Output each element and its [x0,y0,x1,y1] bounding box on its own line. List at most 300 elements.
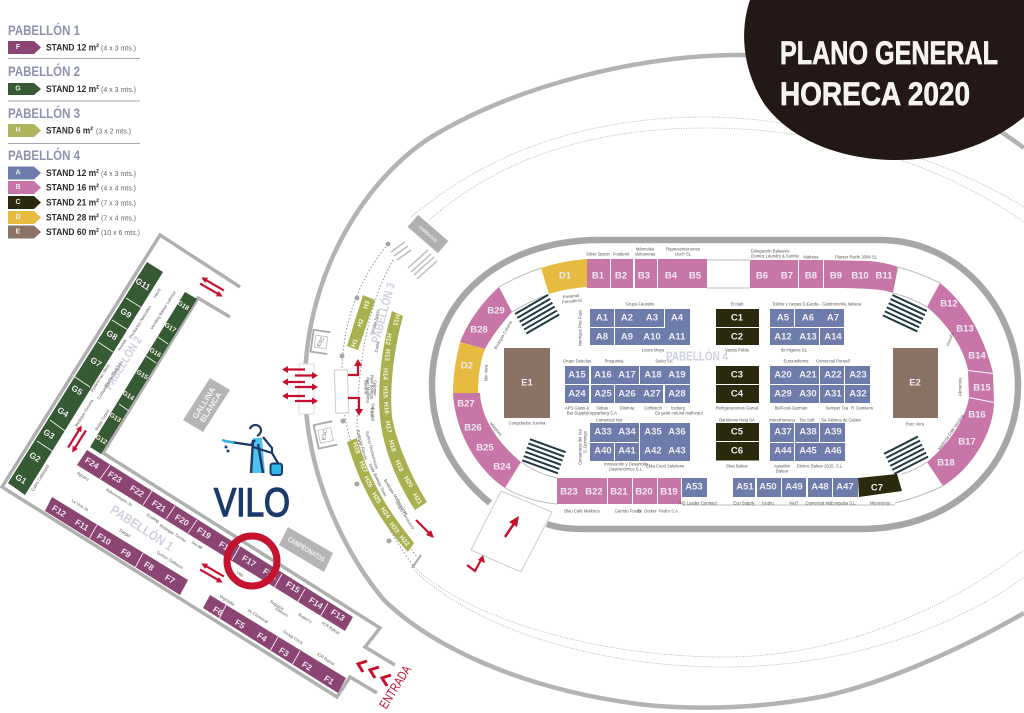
pavilion 4 stand labels: A41 [618,446,636,456]
pavilion 4 exhibitors: Comercial Mut [806,500,833,506]
pavilion 4 stand labels: A23 [849,370,867,380]
pavilion 4 exhibitors: Bartolome Heiq SA [719,418,755,422]
pavilion 4 stand labels: B15 [973,382,991,394]
H labels: H19 [393,459,405,473]
legend [8,21,140,238]
entrance exhibitors: Sidra Mal [370,403,376,421]
arrows bottom of pavilion 2 [64,424,90,454]
pavilion 4 exhibitors: Sidras [596,406,608,410]
pavilion 4 exhibitors: Comercial Ponsell [816,358,850,364]
pavilion 4 exhibitors: Garda - Gastronomía Italiana [807,302,862,306]
F exhibitors: Vegetalia [218,593,236,607]
pavilion 4 exhibitors: Aquathin [774,464,791,468]
F labels: F17 [240,553,258,569]
F exhibitors: Bodegas Tierras [159,523,187,543]
pavilion 4 exhibitors: Marphos [489,421,503,437]
pavilion 4 stand labels: B19 [660,486,678,498]
campeonatos block [279,527,333,572]
pavilion 4 stand labels: A39 [824,426,842,438]
entrance exhibitors: Bavaria [364,380,368,395]
entrada label: ENTRADA [376,662,414,711]
pavilion 4 A stands [565,309,870,497]
campeonatos block: CAMPEONATOS [286,536,326,564]
pavilion 4 stand labels: A21 [799,370,817,380]
pavilion 4 stand labels: B14 [968,350,986,362]
F labels [50,455,347,687]
legend: pabellon 4: STAND 21 m² [46,198,99,208]
F labels: F9 [119,546,133,560]
H labels: H15 [382,386,388,398]
legend: pabellon 4 [8,146,140,238]
G labels: G2 [28,450,43,464]
legend: pabellon 4: STAND 28 m² [46,212,99,224]
H labels: H21 [411,492,423,506]
pavilion 4 exhibitors: Mallorca Café Vending [937,413,966,451]
pavilion 4 stand labels: A47 [836,482,854,492]
pavilion 4 exhibitors [484,246,966,514]
pavilion 4 E stands [504,348,938,418]
pavilion 4 stand labels: D2 [461,360,473,372]
F exhibitors: ICR Balear [316,651,337,667]
legend: pabellon 4: E [16,228,21,236]
F labels: F14 [307,595,325,611]
G labels [14,276,190,486]
H labels: H1 [350,338,360,348]
L arrow up [348,359,362,375]
pavilion 4 exhibitors: Min Vera [484,364,488,381]
pavilion 4 stand labels: A17 [618,370,636,380]
legend: pabellon 4: STAND 12 m² [46,168,99,179]
pavilion 4 exhibitors: Congelados Juvima [509,420,546,426]
pavilion 4 exhibitors: Poncho [945,331,955,347]
pavilion 4 stand labels: A48 [811,482,829,492]
G exhibitors: Vending Balear Lubrisur [149,289,177,330]
pavilion 4 stand labels: A25 [594,388,612,400]
legend: pabellon 4: B [15,184,21,191]
F labels: F21 [150,498,168,514]
pavilion 4 stand labels: B10 [851,270,869,282]
H labels: H26 [362,475,374,489]
H exhibitors: Daily Bodega Suau [368,463,388,498]
pavilion 4 C stands [716,309,902,497]
F labels: F1 [322,673,336,687]
pavilion 4 exhibitors: Blau Café Mallorca [564,508,600,514]
G exhibitors: Bugui Gasoil [94,409,110,431]
pavilion 1 and 2 red arrows [64,275,227,585]
gallina blanca block: GALLINA [191,386,217,421]
pavilion 3 dotted corridor [342,244,417,567]
H exhibitors: Dorada Spirits [369,309,381,335]
G labels: G16 [148,347,162,359]
pavilion 4 D stands [453,259,587,393]
F exhibitors: Ini Chemical [247,608,269,624]
G labels: G8 [105,328,120,342]
pavilion 4 ring [432,240,1018,529]
arrows pavilion 1 [197,561,227,585]
pavilion 4 stand labels: B13 [956,324,974,334]
pavilion 4 exhibitors: Salvo SA [655,358,673,364]
pavilion 4 exhibitors: Toldos y carpas S.L. [772,302,810,306]
H exhibitors: Tulsa [369,407,375,418]
pavilion 4 stand labels: A15 [568,370,586,380]
title text: HORECA 2020 [780,76,970,112]
F exhibitors: Gruop Coca [282,629,304,645]
legend: pabellon 4: C [15,199,21,206]
pavilion 4 stand labels: A51 [736,482,754,492]
pavilion 4 exhibitors: Coffetech [644,406,663,410]
legend: pabellon 4: (7 x 4 mts.) [101,216,136,222]
legend: pabellon 4: (10 x 6 mts.) [101,230,140,237]
F exhibitors: Ruben's [297,612,313,624]
pavilion 4 exhibitors: BidFood-Guzman [775,406,808,410]
pavilion 4 stand labels: C5 [731,426,744,438]
pavilion 3 stands [347,295,427,552]
outer venue ring [305,55,1024,708]
corridor nodes [340,242,392,544]
F labels: F12 [50,503,68,519]
pavilion 4 stand labels: A18 [644,370,662,380]
vilo wordmark: VILO [214,481,290,525]
pavilion 4 exhibitors: Balear [776,468,789,474]
pavilion 4 stand labels: A37 [774,426,792,438]
pavilion 4 exhibitors: Dr. Oetker [637,508,657,514]
pavilion 4 stand labels: A14 [824,332,842,342]
pavilion 4 exhibitors: Tec Soft [799,418,815,422]
pavilion 4 stand labels: A38 [799,426,817,438]
pavilion 4 stand labels: A27 [643,388,661,400]
gimnasio block [408,215,448,253]
pavilion 4 exhibitors: S. Domingo [582,430,588,453]
legend: pabellon 1: (4 x 3 mts.) [101,46,136,52]
H labels: H13 [383,349,391,362]
F exhibitors: La Uva Ja [71,498,90,512]
pavilion 4 stand labels: A32 [849,388,867,400]
pavilion 4 stand labels: A33 [594,426,612,438]
F labels: F13 [329,607,347,623]
pavilion 4 stand labels: B7 [781,270,793,282]
F labels: F20 [173,512,191,528]
service room top: ESC [316,336,326,348]
pavilion 4 stand labels: A19 [668,370,686,380]
H labels: H28 [351,441,361,455]
G labels: G5 [70,383,85,397]
pavilion 4 exhibitors: Bodegas Coloma [493,319,514,350]
F exhibitors: Seguros [269,599,285,611]
G labels: G14 [121,390,135,402]
G labels: G13 [108,412,122,424]
G exhibitors: Hexis [152,287,162,299]
pavilion 1 stands [45,450,353,693]
pavilion 4 stand labels: B1 [592,270,605,282]
pavilion 4 stand labels: C1 [731,312,744,324]
pavilion 4 stand labels: A30 [799,388,817,400]
pavilion 4 stand labels: A16 [594,370,612,380]
pavilion 4 stand labels: C6 [731,446,743,456]
F labels: F3 [277,645,291,659]
F exhibitors: Balears [275,606,289,618]
F labels: F15 [284,579,302,595]
pavilion 4 exhibitors: Panamar [562,293,580,299]
pavilion 4 stand labels: A49 [785,482,803,492]
pavilion 4 exhibitors: Ibi Higiene SL [781,348,808,352]
pavilion 4 stand labels: A22 [824,370,842,380]
pavilion 4 exhibitors: Ivernigas Prat Faus [578,310,582,346]
pavilion 4 stand labels: B21 [610,486,628,498]
H labels: H18 [387,439,397,453]
pavilion 4 exhibitors: Ekka Food Solutions [646,464,684,468]
pavilion 4 stand labels: A53 [685,482,703,492]
G exhibitors: Cafés Cafetland [30,463,50,492]
pavilion 4 exhibitors: Lluch SL [675,252,692,256]
pavilion 4 exhibitors: Microvinos [870,500,890,506]
pavilion 2 watermark: PABELLÓN 2 [100,333,145,392]
G exhibitors: Productos Naturales [128,305,152,339]
H labels: H25 [370,491,382,505]
H exhibitors: Colomer [372,380,378,397]
pavilion 4 stand labels: A3 [646,312,658,324]
entry arrow [505,516,519,537]
pavilion 4 watermark: PABELLÓN 4 [666,348,729,364]
pavilion 4 stand labels: A36 [668,426,686,438]
legend: pabellon 2: PABELLÓN 2 [8,62,80,79]
pavilion 4 stand labels: A9 [621,332,633,342]
pavilion 4 exhibitors: Innovación y Desarrollo [604,462,649,466]
pavilion 4 exhibitors: Shat Balear [726,464,749,468]
G labels: G4 [56,405,71,419]
H exhibitors [356,309,416,531]
G exhibitors: Bodegas Excelia [74,398,95,428]
pavilion 4 exhibitors: Licors Moya [642,348,665,352]
F labels: F5 [233,617,247,631]
pavilion 4 exhibitors: Icedru [762,500,774,506]
legend: pabellon 4: D [15,214,21,221]
pavilion 1 watermark: PABELLÓN 1 [108,502,176,554]
F labels: F19 [195,525,213,541]
pavilion 4 exhibitors: Iceberg [671,406,686,410]
legend: pabellon 3: (3 x 2 mts.) [96,128,131,136]
pavilion 4 stand labels: A29 [774,388,792,400]
G labels: G17 [163,322,177,334]
H exhibitors: Marí Mallorca [366,377,370,403]
F exhibitors: Vilo [236,570,245,578]
H exhibitors: Bodegas Ramón [356,429,369,461]
pavilion 4 stand labels: A13 [799,332,817,342]
pavilion 4 exhibitors: Comercial Nut [596,418,623,422]
H labels: H14 [381,368,389,380]
legend: pabellon 4: (4 x 3 mts.) [101,171,136,178]
pavilion 4 stand labels: A31 [824,388,842,400]
title text [780,35,998,112]
gate pavilion 3 [299,330,376,449]
pavilion 4 stand labels: E2 [909,378,921,388]
pavilion 4 exhibitors: Semper Tea [826,406,849,410]
pavilion 4 stand labels: B5 [689,270,702,282]
pavilion 4 exhibitors: Ruiz Vera [906,422,925,426]
G exhibitors: Aroma [117,338,128,352]
F exhibitors: Aguara [76,470,91,482]
pavilion 4 exhibitors: Grupo Faustino [626,302,655,306]
legend: pabellon 1: STAND 12 m² [46,42,99,54]
pavilion 4 stand labels: A35 [644,426,662,438]
F labels: F10 [95,531,113,547]
pavilion 4 exhibitors: Es gelat natural mallorquí [655,410,704,416]
title blob [744,0,1024,160]
pavilion 4 stand labels: A12 [774,332,792,342]
pavilion 4 stand labels: A42 [644,446,662,456]
pavilion 4 exhibitors: Distroc Balear 2015, S.L. [797,464,843,468]
H labels: H22 [397,534,411,548]
F labels: F6 [211,604,225,618]
highlight circle [227,536,277,586]
legend: pabellon 1: PABELLÓN 1 [8,21,80,38]
H exhibitors: Cafés [374,341,380,353]
stairs pavilion 4 [515,295,928,474]
pavilion 4 exhibitors: APS Glass & [565,406,589,410]
H labels: H20 [402,475,414,489]
pavilion 2 stands [8,262,197,495]
pavilion 4 stand labels: A8 [596,332,608,342]
arrows top of pavilion 2 [197,275,227,299]
pavilion 4 stand labels: B4 [665,270,678,282]
legend: pabellon 1 [8,21,140,58]
legend: pabellon 4: STAND 60 m² [46,227,99,238]
pavilion 4 stand labels: B6 [756,270,768,282]
pavilion 4 stand labels: B24 [493,462,511,472]
pavilion 4 stand labels: C7 [871,482,883,494]
pavilion 4 stand labels: A28 [668,388,686,400]
H labels: H11 [391,314,401,327]
H labels: H27 [358,460,369,474]
F labels: F24 [83,455,101,471]
H exhibitors: Surfers Restauración [364,430,380,470]
pavilion 4 stand labels: C4 [731,388,744,400]
pavilion 4 stand labels: C2 [731,332,743,342]
pavilion 4 stand labels: A43 [668,446,686,456]
F labels: F18 [217,539,235,555]
F exhibitors: Sol 88 [191,540,204,551]
pavilion 4 stand labels: A6 [802,312,814,324]
vilo icon [222,425,282,475]
pavilion 4 stand labels: B12 [940,298,958,310]
G exhibitors: Comunidad de Baleares [96,360,124,400]
pavilion 4 exhibitors: Proquimia [605,358,624,364]
vilo logo [214,425,290,525]
F labels: F22 [128,483,146,499]
pavilion 4 stand labels: A50 [759,482,777,492]
pavilion 4 exhibitors: Eco Supply [733,500,755,506]
pavilion 4 stand labels: A45 [799,446,817,456]
G labels: G7 [89,355,104,369]
pavilion 4 stand labels: B16 [968,410,986,420]
legend: pabellon 2 [8,62,140,101]
G labels: G15 [135,369,149,381]
pavilion 4 stand labels: A26 [618,388,636,400]
pavilion 3 watermark: PABELLÓN 3 [367,281,398,345]
F exhibitors: Dargel [118,528,132,538]
pavilion 4 stand labels: A34 [618,426,636,438]
G labels: G11 [134,276,152,293]
entry square [467,491,552,572]
pavilion 4 exhibitors: Bar Supply [567,410,588,416]
pavilion 4 stand labels: B8 [805,270,817,282]
H labels: H12 [383,333,392,346]
entrance exhibitors: Real Bodega [370,375,374,400]
G labels: G9 [119,306,134,320]
legend: pabellon 4: (7 x 3 mts.) [101,200,136,208]
diagonal arrow [416,520,434,538]
pavilion 4 stand labels: A20 [774,370,792,380]
gallina blanca block: BLANCA [198,390,224,424]
pavilion 4 exhibitors: Refrigeraciones Garval [716,406,758,410]
legend: pabellon 2: STAND 12 m² [46,84,99,95]
pavilion 4 exhibitors: NetT [789,500,799,506]
pavilion 4 stand labels: B28 [470,324,488,336]
legend: pabellon 3: H [15,127,21,134]
pavilion 4 exhibitors: Pedro S.A. [659,508,679,514]
pavilion 4 stand labels: B23 [560,486,578,498]
pavilions 1 and 2 wall outline [2,235,395,697]
gate red arrows [282,359,434,538]
pavilion 4 stand labels: A2 [621,312,633,324]
H exhibitors: Bodegas Mallorquinas [383,478,409,516]
pavilion 4 exhibitors: Gastronómico S.L. [609,466,643,472]
pavilion 4 exhibitors: Foodenit [613,252,630,256]
G labels: G12 [94,434,108,446]
G labels: G1 [14,472,29,486]
pavilion 4 stand labels: C3 [731,370,743,380]
pavilion 4 exhibitors: Silver Spoon [586,252,611,256]
pavilion 4 exhibitors: Eurouniforms [784,358,808,364]
legend: pabellon 3 [8,104,140,144]
gallina blanca block [183,378,230,432]
G labels: G18 [176,300,190,312]
pavilion 4 exhibitors: Sa Fàbrica de Gelats [821,418,861,422]
pavilion 4 stand labels: A11 [669,332,686,342]
F exhibitors: Gomer Software [156,550,185,571]
G exhibitors [30,287,177,492]
L arrow down [348,398,363,416]
entrance chevrons [358,661,391,686]
F labels: F23 [106,469,124,485]
pavilion 4 exhibitors: Vanda Pobla [725,348,750,352]
H labels: H2 [356,318,366,328]
F exhibitors: Indumentaria Ja [105,487,134,507]
H exhibitors: Grupo Cervecero [394,500,416,531]
H labels: H24 [379,506,391,520]
F exhibitors: ICR Balear [321,620,342,636]
pavilion 4 exhibitors: Grupo Debelas [563,358,591,364]
G labels: G3 [42,427,57,441]
pavilion 4 exhibitors: Alimentos [958,378,962,396]
pavilion 4 stand labels: B27 [457,398,475,410]
F labels: F7 [163,572,177,586]
pavilion 4 stand labels: B18 [937,458,955,468]
pavilion 4 stand labels [457,270,991,498]
pavilion 4 exhibitors: Domus Laundry & Suimla [751,254,799,258]
pavilion 4 stand labels: B20 [635,486,653,498]
pavilion 4 stand labels: A4 [671,312,684,324]
entry L arrow [467,555,485,571]
H labels [350,300,423,548]
pavilion 4 stand labels: B3 [638,270,650,282]
pavilion 4 exhibitors: Kopparberg S.A [587,410,617,416]
legend: pabellon 3: STAND 6 m² [46,126,93,136]
entrance exhibitors [364,375,376,421]
H labels: H23 [388,521,401,535]
pavilion 4 exhibitors: Distruta [620,406,635,410]
F labels: F2 [300,659,314,673]
F labels: F11 [73,517,91,533]
